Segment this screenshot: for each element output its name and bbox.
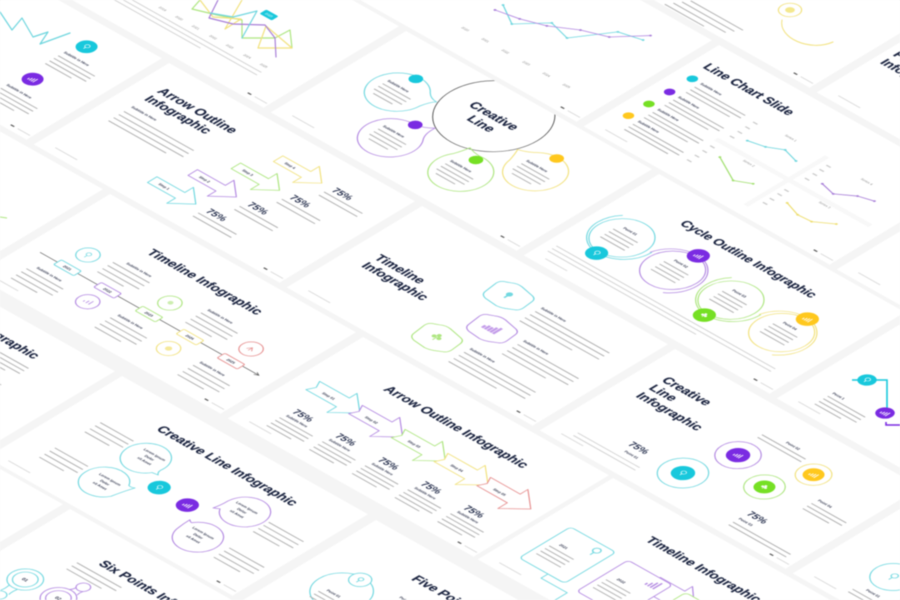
box 2021: 2021 — [558, 544, 569, 550]
card: top right title — [817, 11, 900, 231]
speech bubble: teal upper — [110, 437, 185, 481]
year labels: 2023 — [521, 61, 531, 66]
arrow: step 4: Step 4 — [283, 162, 297, 170]
year labels: 2024 — [541, 72, 551, 78]
title: Cycle Outline Infographic — [677, 218, 821, 300]
arrow: step 1 — [139, 172, 209, 212]
chart: purple — [805, 161, 889, 209]
text: point 1: Point 1 — [831, 392, 846, 400]
text blocks: Subtitle in Here — [125, 262, 153, 278]
bubble: green: Subtitle Here — [449, 160, 472, 173]
speech bubble: teal upper: sit Amet — [136, 456, 153, 466]
bubble: green — [414, 144, 510, 199]
chart: teal line — [491, 0, 643, 70]
ring: purple — [705, 436, 771, 474]
connector teal — [524, 574, 574, 600]
chart: teal zigzag top left — [0, 12, 70, 44]
text: point 01 — [310, 587, 353, 600]
title — [453, 100, 523, 140]
legend: Subtitle Here — [677, 96, 700, 109]
box 2021 — [519, 527, 616, 583]
tag: teal label: 2023 — [264, 12, 274, 18]
stats row — [267, 407, 501, 540]
year 2021: 2021 — [62, 265, 72, 271]
ring: teal — [647, 452, 719, 494]
chart: teal: Series 1 — [784, 134, 798, 142]
speech bubble: purple upper: Dolor — [236, 508, 248, 515]
text block 2: Subtitle in Here — [522, 340, 550, 355]
left edge green line fragment — [0, 217, 7, 218]
text lines — [67, 563, 121, 594]
stat 2: 75% — [244, 201, 271, 217]
arrow: step 02 — [339, 401, 418, 446]
year 2022: 2022 — [102, 287, 113, 294]
card: data chart far left — [0, 0, 162, 140]
year 2023: 2023 — [143, 311, 154, 317]
arrow connector purple — [630, 573, 713, 600]
arrow: step 1: Step 1 — [157, 183, 170, 190]
badge and text: teal — [44, 38, 124, 84]
card: timeline hexagons — [287, 206, 668, 426]
text: point 01 — [848, 584, 897, 600]
speech bubble: purple lower: Lorem Ipsum — [191, 526, 216, 540]
stat 3: 75% — [286, 194, 313, 209]
ring — [860, 558, 900, 596]
text block 1: Subtitle in Here — [539, 307, 567, 323]
card: six points — [0, 509, 316, 600]
year labels — [157, 6, 269, 69]
bubble: teal — [351, 64, 452, 122]
stat: point 03: Point 03 — [737, 517, 754, 527]
text block 3 — [449, 348, 543, 402]
year labels: 2025 — [259, 63, 269, 69]
text block 3: Subtitle in Here — [468, 348, 496, 363]
stats row: Subtitle Here — [327, 439, 351, 452]
stats row: 75% — [460, 504, 487, 520]
cycle item 3: Point 03 — [731, 289, 747, 298]
text: point 01: Point 01 — [865, 589, 881, 598]
box 2022 — [577, 560, 673, 600]
timeline circles — [29, 245, 270, 383]
legend — [611, 73, 755, 158]
text blocks: Subtitle in Here — [35, 266, 63, 282]
stat: point 01: Point 01 — [623, 450, 639, 460]
text block 1 — [520, 307, 617, 362]
year labels: 2019 — [157, 6, 168, 12]
arrow: step 03: Step 03 — [406, 440, 421, 449]
arrow: step 3 — [223, 158, 293, 198]
title: Infographic — [141, 93, 216, 136]
card: line chart slide — [584, 45, 900, 265]
text: point 02: Point 02 — [785, 441, 801, 451]
badge and text: teal: Subtitle in Here — [62, 51, 90, 67]
text block: Subtitle in Here — [130, 106, 158, 121]
title: Line Chart Slide — [700, 61, 799, 117]
year 2025 — [217, 353, 245, 369]
hexagon: green — [405, 319, 470, 357]
stats row: Subtitle Here — [413, 487, 437, 500]
cycle item 4 — [725, 298, 840, 364]
speech bubble: purple lower: Dolor — [192, 533, 204, 540]
title: Creative — [658, 375, 716, 408]
legend: Subtitle Here — [636, 120, 660, 134]
arrow: step 01: Step 01 — [321, 392, 336, 401]
chart: green — [687, 143, 770, 190]
stat 2 — [234, 200, 289, 231]
cycle item 3 — [671, 268, 787, 336]
card: far right row — [837, 188, 900, 408]
stat 4: 75% — [328, 187, 355, 202]
stat 4 — [319, 185, 374, 217]
year labels: 2022 — [208, 34, 218, 40]
arrow: step 04 — [425, 449, 503, 494]
circle arc — [297, 565, 387, 600]
speech bubble: purple upper — [207, 490, 281, 533]
bubble: yellow — [484, 140, 586, 199]
legend: Subtitle Here — [656, 108, 680, 122]
year 2021 — [54, 260, 81, 276]
big circle — [431, 80, 556, 153]
speech bubble: purple lower: sit Amet — [185, 535, 202, 544]
chart: purple: Series 4 — [859, 178, 874, 186]
point 01: 01 — [19, 577, 30, 583]
year labels: 2020 — [460, 26, 470, 32]
description lines — [52, 0, 261, 78]
text: point 01: Point 01 — [325, 589, 342, 598]
stat 1: 75% — [202, 208, 229, 223]
cycle item 1: Point 01 — [622, 227, 638, 236]
ring: yellow — [788, 460, 839, 490]
text: point 04 — [803, 499, 854, 528]
badge: purple — [171, 496, 204, 515]
text block 2 — [502, 340, 586, 388]
card: multi line chart top — [18, 0, 399, 108]
speech bubble: teal lower: Dolor — [99, 479, 111, 487]
stat 1 — [193, 206, 248, 238]
year labels: 2021 — [480, 37, 490, 43]
speech bubble: teal upper: Dolor — [143, 455, 156, 462]
stat: point 03 — [729, 510, 810, 557]
stat: point 01: 75% — [625, 441, 652, 456]
stats row: Subtitle Here — [456, 511, 479, 524]
arrow: step 05 — [467, 473, 546, 518]
title: Infographic — [633, 390, 707, 433]
title — [633, 375, 733, 433]
card: creative line bubbles — [271, 24, 664, 251]
legend: Subtitle Here — [699, 82, 723, 96]
stats row: Subtitle Here — [285, 415, 309, 428]
cycle item 4: Point 04 — [781, 321, 799, 331]
description — [548, 246, 775, 374]
text blocks — [8, 236, 287, 395]
stats row: 75% — [417, 480, 444, 496]
timeline axis — [38, 251, 261, 376]
text blocks: Subtitle in Here — [116, 314, 144, 330]
text lines top cards — [561, 0, 743, 40]
card: creative line rings — [540, 349, 900, 569]
hexagon: teal — [477, 277, 541, 315]
speech bubble: purple upper: Lorem Ipsum — [235, 501, 259, 515]
badge and text: purple — [0, 70, 68, 116]
stats row: 75% — [374, 456, 401, 472]
chart: green: Series 2 — [742, 159, 756, 167]
year labels: 2021 — [191, 25, 201, 30]
point 02 — [32, 575, 98, 600]
card: yellow circle top — [564, 0, 900, 88]
text block — [109, 106, 203, 160]
year 2024: 2024 — [184, 334, 196, 341]
text blocks: Subtitle in Here — [206, 309, 234, 324]
speech bubble: purple upper: sit Amet — [228, 509, 245, 519]
year labels: 2020 — [174, 15, 184, 21]
card: bottom row filler — [0, 366, 63, 586]
year labels: 2025 — [561, 83, 571, 89]
stat 3 — [277, 192, 331, 224]
year labels — [460, 26, 571, 89]
bubble: yellow: Subtitle Here — [525, 159, 549, 173]
chart: teal — [730, 118, 815, 167]
text: point 04: Point 04 — [817, 499, 834, 509]
speech bubble: teal lower: sit Amet — [91, 481, 108, 491]
year 2023 — [135, 306, 163, 322]
speech bubble: teal lower — [68, 461, 143, 505]
text: point 1 — [815, 392, 872, 425]
title: Timeline Infographic — [143, 247, 267, 317]
text lines — [38, 422, 310, 577]
card: point list right — [777, 317, 900, 537]
arrow: step 3: Step 3 — [241, 169, 254, 177]
title: Timeline — [371, 252, 430, 286]
stats row: 75% — [289, 408, 316, 424]
card: timeline boxes — [475, 478, 859, 600]
arrow: step 01 — [296, 377, 375, 422]
speech bubble: purple lower — [161, 516, 234, 558]
chart: zigzag lines top — [192, 0, 292, 57]
chart: purple line — [495, 0, 651, 67]
year labels: 2022 — [500, 49, 510, 55]
title: Infographic — [358, 260, 433, 302]
arrow: step 02: Step 02 — [363, 416, 379, 425]
title: Line — [645, 382, 682, 403]
cycle item 2 — [616, 235, 732, 302]
bubble: teal: Subtitle Here — [386, 80, 410, 93]
card: timeline with line — [0, 194, 356, 414]
card: right bottom ring — [793, 492, 900, 600]
tag: teal label — [259, 10, 279, 20]
bubble: purple — [344, 107, 444, 165]
card: five points — [241, 520, 622, 600]
arrow: step 2: Step 2 — [198, 176, 211, 183]
title: Arrow Outline Infographic — [380, 384, 533, 470]
card: left edge row — [0, 51, 103, 271]
cycle item 1 — [562, 206, 678, 274]
bubble: purple: Subtitle Here — [382, 125, 405, 138]
stat: point 01 — [573, 420, 660, 470]
card: arrow outline five steps — [228, 337, 609, 557]
card: line chart top centre — [331, 0, 712, 122]
badge and text: purple: Subtitle in Here — [5, 84, 33, 99]
chart: yellow — [763, 185, 849, 234]
year 2024 — [176, 329, 204, 345]
badge: teal — [143, 478, 176, 497]
title: Line — [463, 113, 499, 134]
title: Creative Line Infographic — [153, 424, 302, 508]
panel dividers — [673, 116, 900, 252]
arrow: step 03 — [382, 425, 461, 470]
point 01 — [0, 564, 51, 600]
speech bubble: teal upper: Lorem Ipsum — [142, 448, 167, 462]
box green — [634, 593, 731, 600]
arrow: step 05: Step 05 — [492, 488, 507, 497]
stats row: 75% — [332, 432, 359, 448]
card: creative line speech bubbles — [0, 376, 368, 596]
flow: teal and purple connector — [852, 372, 900, 425]
year labels: 2023 — [225, 44, 235, 50]
ring: green — [735, 470, 794, 504]
year 2025: 2025 — [225, 358, 236, 365]
text: point 02 — [758, 431, 812, 462]
card: arrow outline four steps — [34, 63, 415, 283]
yellow badge and arc — [774, 0, 833, 45]
box 2022: 2022 — [615, 578, 626, 584]
card: left edge title — [0, 233, 115, 453]
cycle item 2: Point 02 — [672, 259, 689, 269]
stats row: Subtitle Here — [370, 463, 394, 476]
arrow: step 04: Step 04 — [449, 464, 465, 473]
badge — [344, 570, 377, 589]
year labels: 2024 — [242, 54, 252, 59]
title: Creative — [465, 100, 523, 132]
hexagon: purple — [460, 310, 524, 348]
chart: yellow: Series 3 — [817, 201, 832, 209]
year 2022 — [94, 282, 121, 298]
stat: point 03: 75% — [743, 510, 770, 526]
text lines — [0, 333, 28, 387]
speech bubble: teal lower: Lorem Ipsum — [98, 473, 122, 487]
arrow: step 4 — [265, 151, 335, 191]
title: Arrow Outline — [154, 86, 242, 136]
text blocks: Subtitle in Here — [198, 361, 226, 377]
arrow: step 2 — [179, 165, 250, 205]
card: cycle outline — [524, 174, 900, 394]
